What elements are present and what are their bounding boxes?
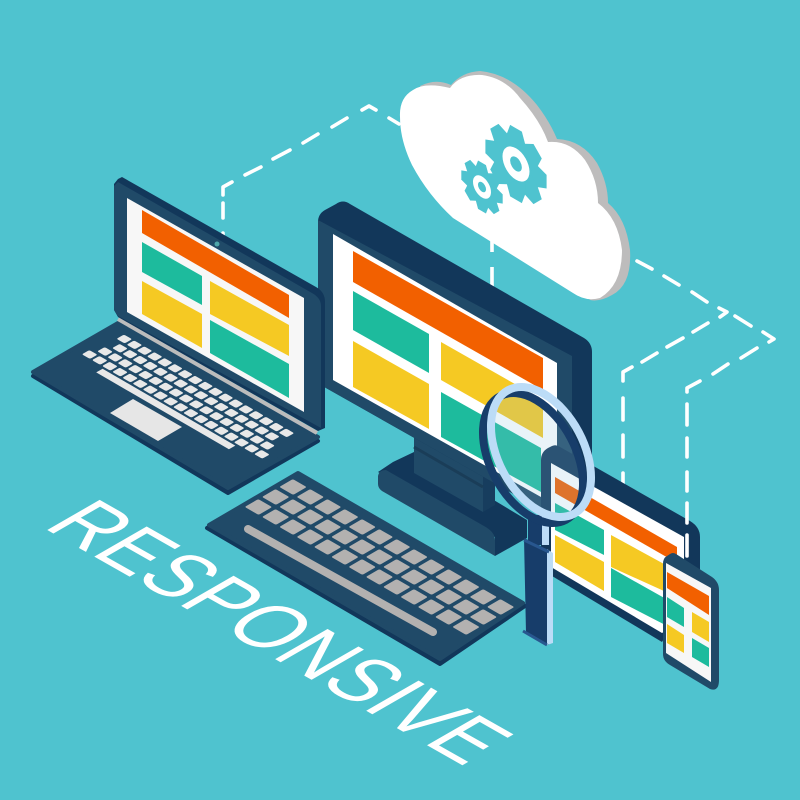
laptop touchpad bbox=[110, 399, 182, 441]
stand neck bbox=[414, 430, 483, 512]
dashed connector: laptop to cloud bbox=[223, 106, 399, 250]
title: RESPONSIVE: RESPONSIVE bbox=[25, 488, 533, 777]
stand base bbox=[378, 452, 527, 556]
laptop lid bbox=[114, 177, 325, 431]
keyboard keys bbox=[245, 479, 514, 635]
phone bbox=[663, 553, 719, 690]
cloud with gears bbox=[400, 71, 630, 300]
magnifier lens bbox=[469, 376, 605, 534]
laptop keyboard keys bbox=[77, 332, 301, 462]
tablet bbox=[541, 445, 700, 642]
dashed connector: cloud to monitor bbox=[490, 238, 494, 287]
magnifier light ring bbox=[470, 370, 612, 534]
magnifier dark ring bbox=[462, 376, 604, 540]
desktop monitor bbox=[318, 202, 592, 527]
laptop base bbox=[33, 323, 318, 493]
dashed connector: cloud to right junction bbox=[623, 261, 774, 491]
magnifier handle bbox=[523, 515, 553, 645]
laptop camera bbox=[214, 242, 220, 246]
dashed connector: over tablet bbox=[685, 503, 689, 556]
laptop bbox=[33, 177, 325, 493]
monitor stand bbox=[378, 430, 527, 556]
keyboard space bar bbox=[248, 529, 433, 632]
laptop hinge bbox=[118, 319, 317, 433]
desktop keyboard bbox=[207, 473, 525, 664]
icon: large gear bbox=[485, 111, 547, 217]
magnifying glass bbox=[462, 370, 612, 645]
icon: small gear bbox=[461, 151, 503, 223]
